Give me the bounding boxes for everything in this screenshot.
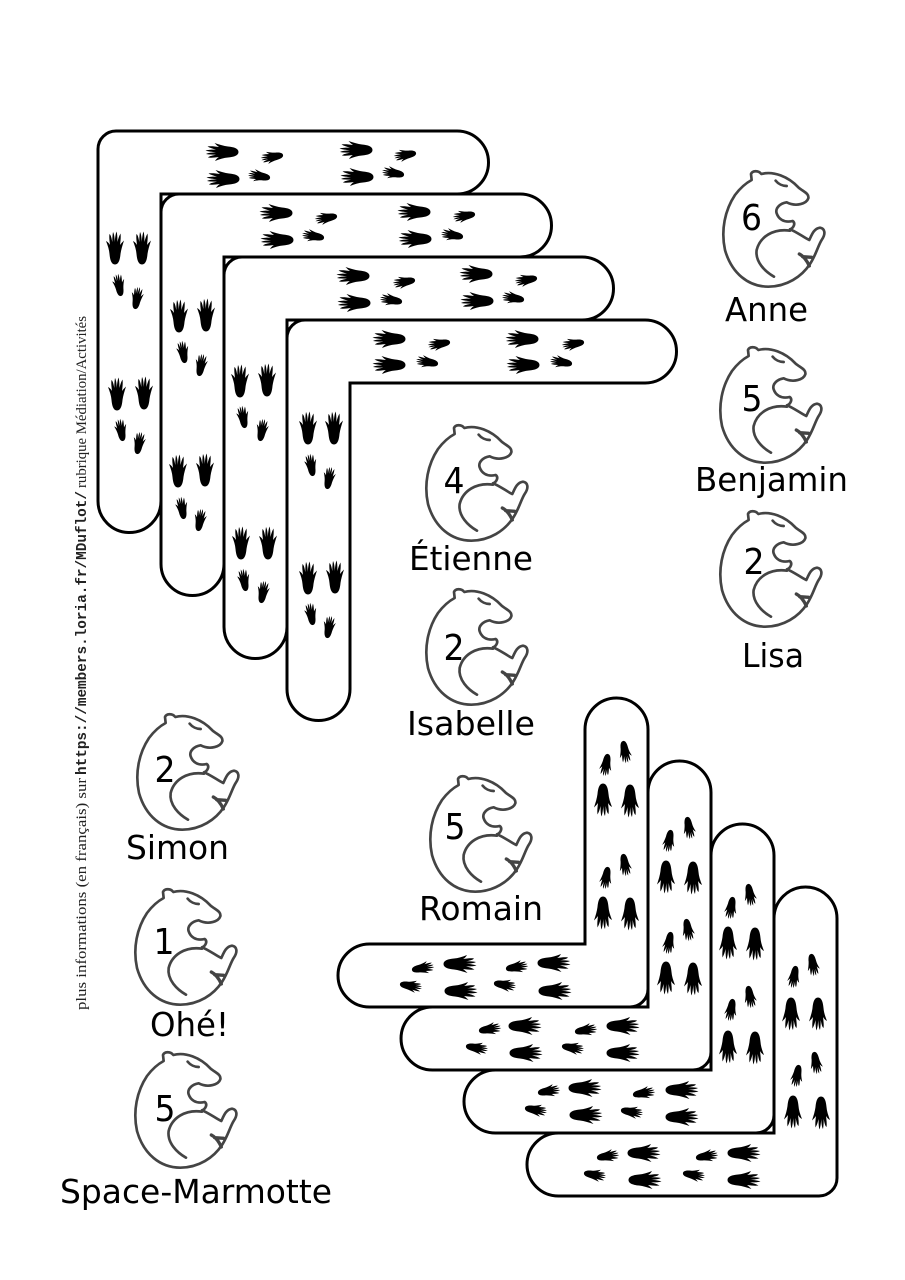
marmot: Space-Marmotte 5: 5	[154, 1089, 176, 1130]
marmot: Anne 6: Anne	[725, 290, 808, 329]
marmot: Anne 6	[723, 171, 824, 329]
marmot: Simon 2	[126, 714, 238, 867]
card B bottom-right	[401, 761, 711, 1070]
marmot: Anne 6: 6	[741, 198, 762, 239]
card 4 top-left	[287, 320, 677, 720]
marmot: Étienne 4	[409, 425, 533, 578]
card group: top-left boomerang cards with footprints	[98, 131, 677, 720]
side note: vertical credit text: rubrique Médiation/Activités	[74, 316, 90, 488]
marmot: Romain 5: Romain	[419, 889, 543, 928]
marmot: Lisa 2: Lisa	[742, 636, 804, 675]
side note: vertical credit text: https://members.loria.fr/MDuflot/	[74, 491, 91, 775]
marmot: Isabelle 2: 2	[444, 628, 464, 669]
card D bottom-right	[527, 887, 837, 1196]
marmot: Ohé! 1: Ohé!	[150, 1005, 229, 1044]
card 1 top-left	[98, 131, 489, 532]
marmot: Ohé! 1: 1	[154, 922, 174, 963]
card 3 top-left	[224, 257, 614, 658]
card 2 top-left	[161, 194, 552, 596]
marmot: Étienne 4: 4	[444, 461, 464, 502]
marmot: Space-Marmotte 5	[60, 1052, 332, 1211]
marmot: Isabelle 2	[407, 589, 535, 743]
marmot: Lisa 2: 2	[744, 542, 764, 583]
side note: vertical credit text: plus informations (en français) sur	[74, 778, 90, 1010]
marmot: Lisa 2	[720, 511, 821, 675]
marmot: Benjamin 5	[695, 347, 848, 499]
card C bottom-right	[464, 824, 774, 1133]
marmot: Simon 2: Simon	[126, 828, 229, 867]
side note: vertical credit text	[74, 316, 91, 1010]
marmot: Romain 5: 5	[444, 807, 466, 848]
marmot: Benjamin 5: Benjamin	[695, 460, 848, 499]
marmot: Simon 2: 2	[154, 750, 176, 791]
marmot: Ohé! 1	[135, 889, 236, 1044]
marmot: Isabelle 2: Isabelle	[407, 704, 535, 743]
marmot: Benjamin 5: 5	[742, 379, 762, 420]
marmot: Romain 5	[419, 776, 543, 928]
marmot: Space-Marmotte 5: Space-Marmotte	[60, 1172, 332, 1211]
card A bottom-right	[338, 698, 648, 1007]
card group: bottom-right boomerang cards with footprints	[338, 698, 837, 1196]
marmot: Étienne 4: Étienne	[409, 538, 533, 578]
